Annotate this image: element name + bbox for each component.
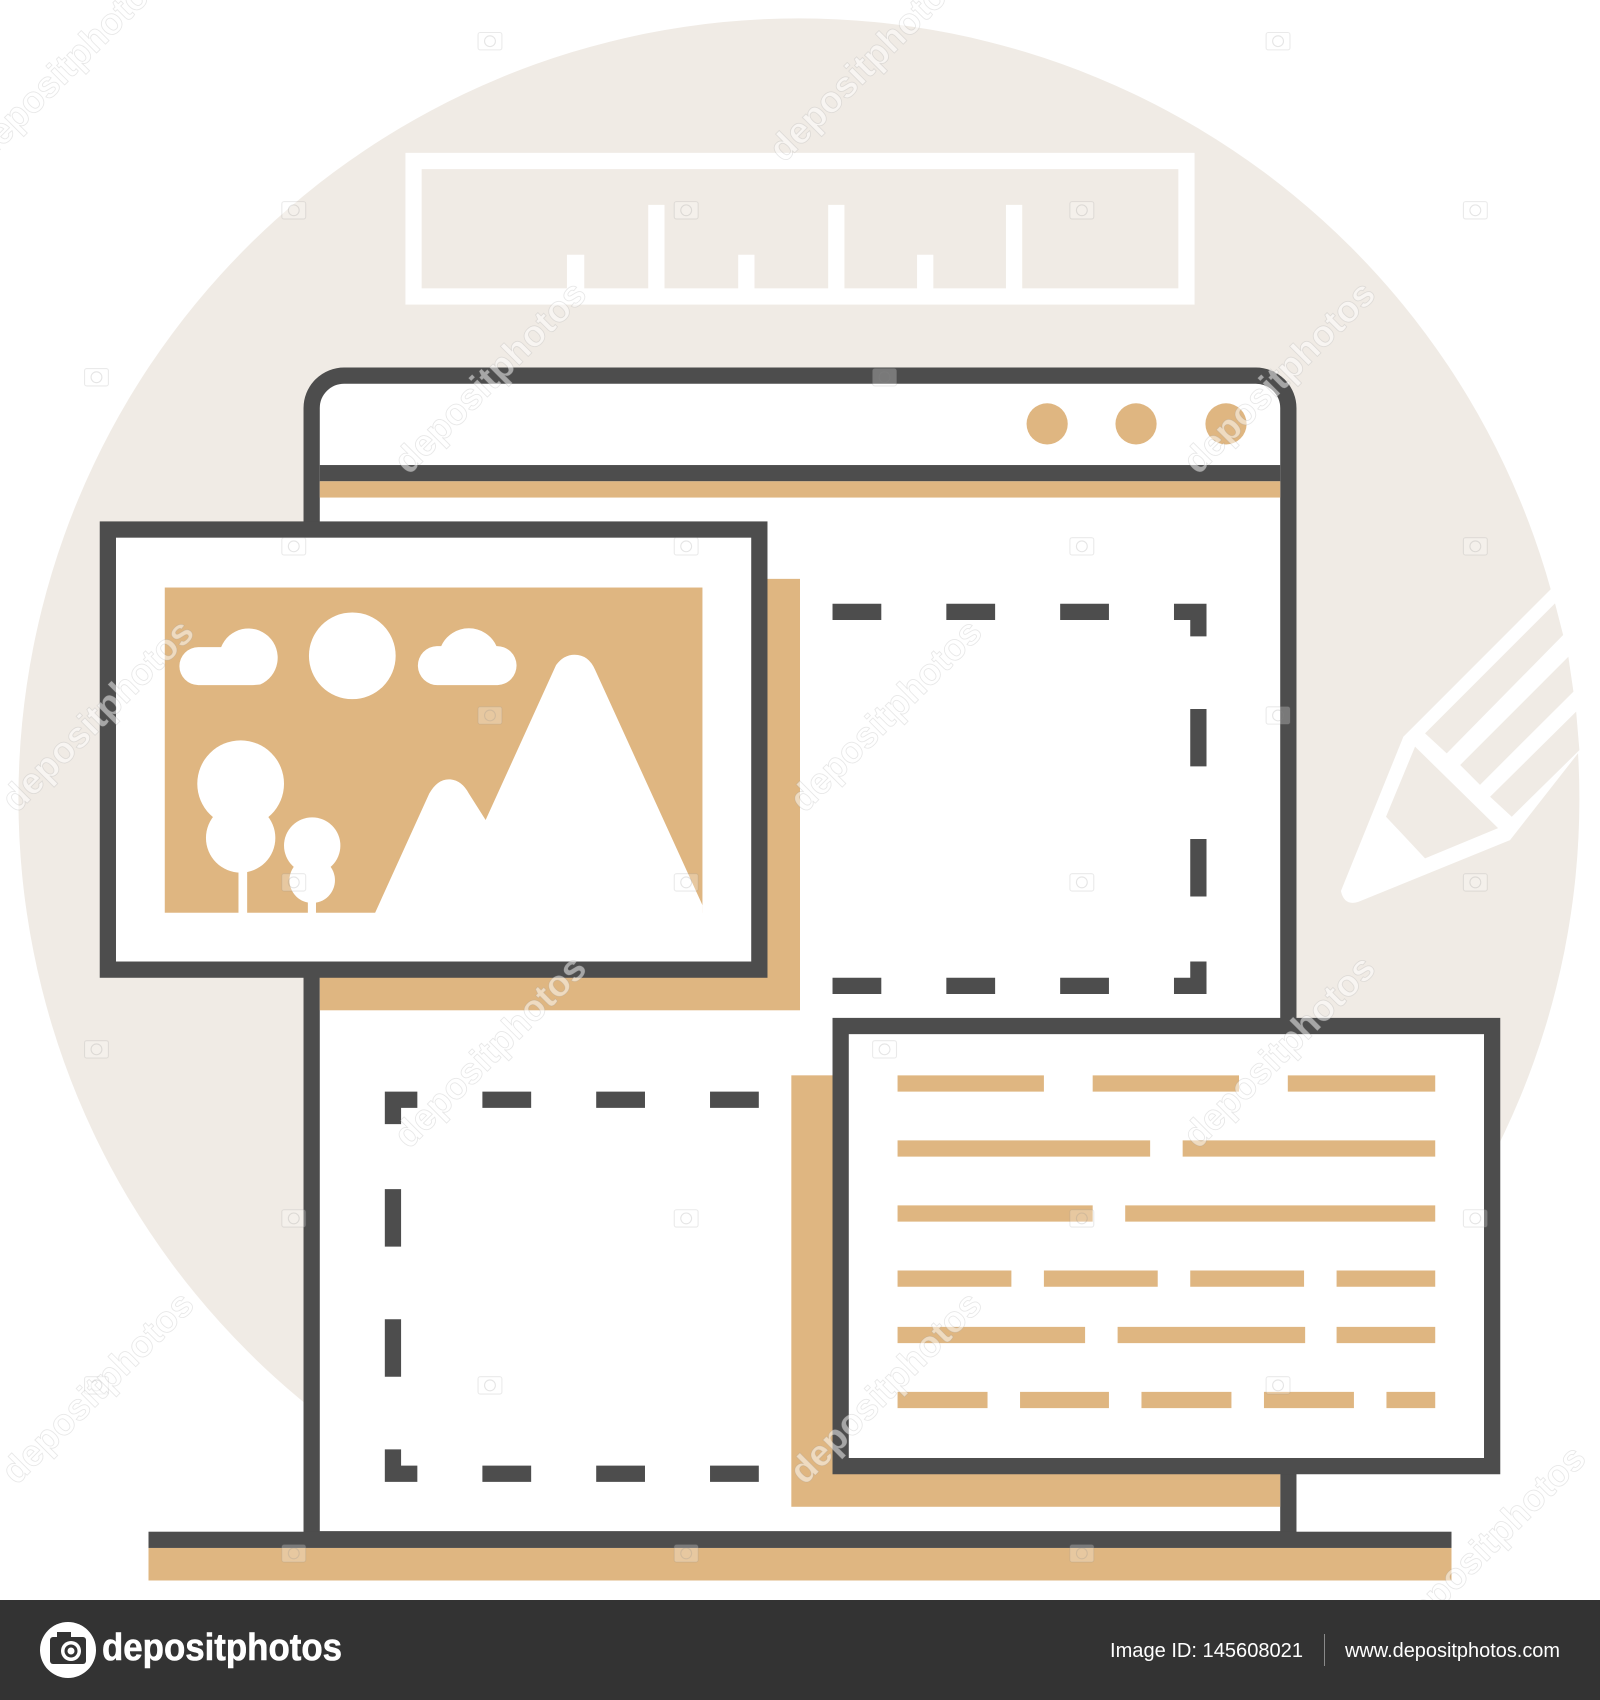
watermarks: depositphotos [1175,947,1383,1156]
watermark camera marks [85,33,1487,1562]
desk base [149,1532,1451,1580]
watermarks: depositphotos [781,611,990,820]
dashed placeholder: lower left [385,1092,759,1482]
logo wordmark: depositphotos [102,1627,342,1669]
tree small [284,817,340,914]
watermarks: depositphotos [386,947,594,1156]
image id: Image ID: 145608021 [1110,1640,1303,1662]
picture background [165,588,702,913]
dashed placeholder: upper right [833,604,1207,994]
browser window [312,376,1288,1539]
text panel shadow [791,1075,1280,1507]
window control dots [1027,403,1247,444]
watermarks: depositphotos [1175,273,1383,481]
cloud left [179,628,278,685]
tree large [197,740,284,914]
window title bar divider [320,465,1280,481]
footer bar [0,1600,1600,1700]
text lines [898,1075,1435,1408]
cloud right [418,628,517,685]
icon: ruler [414,161,1186,296]
watermarks: depositphotos [781,1283,990,1492]
icon: depositphotos logo [40,1622,96,1678]
sun [309,612,396,699]
image panel shadow [320,579,800,1010]
image panel [108,530,759,970]
tan strip [320,481,1280,498]
divider [1324,1634,1325,1666]
website url: www.depositphotos.com [1344,1640,1560,1662]
text panel [841,1026,1492,1466]
mountains [375,655,702,914]
watermarks: depositphotos [386,273,594,481]
icon: pencil [1341,588,1580,903]
